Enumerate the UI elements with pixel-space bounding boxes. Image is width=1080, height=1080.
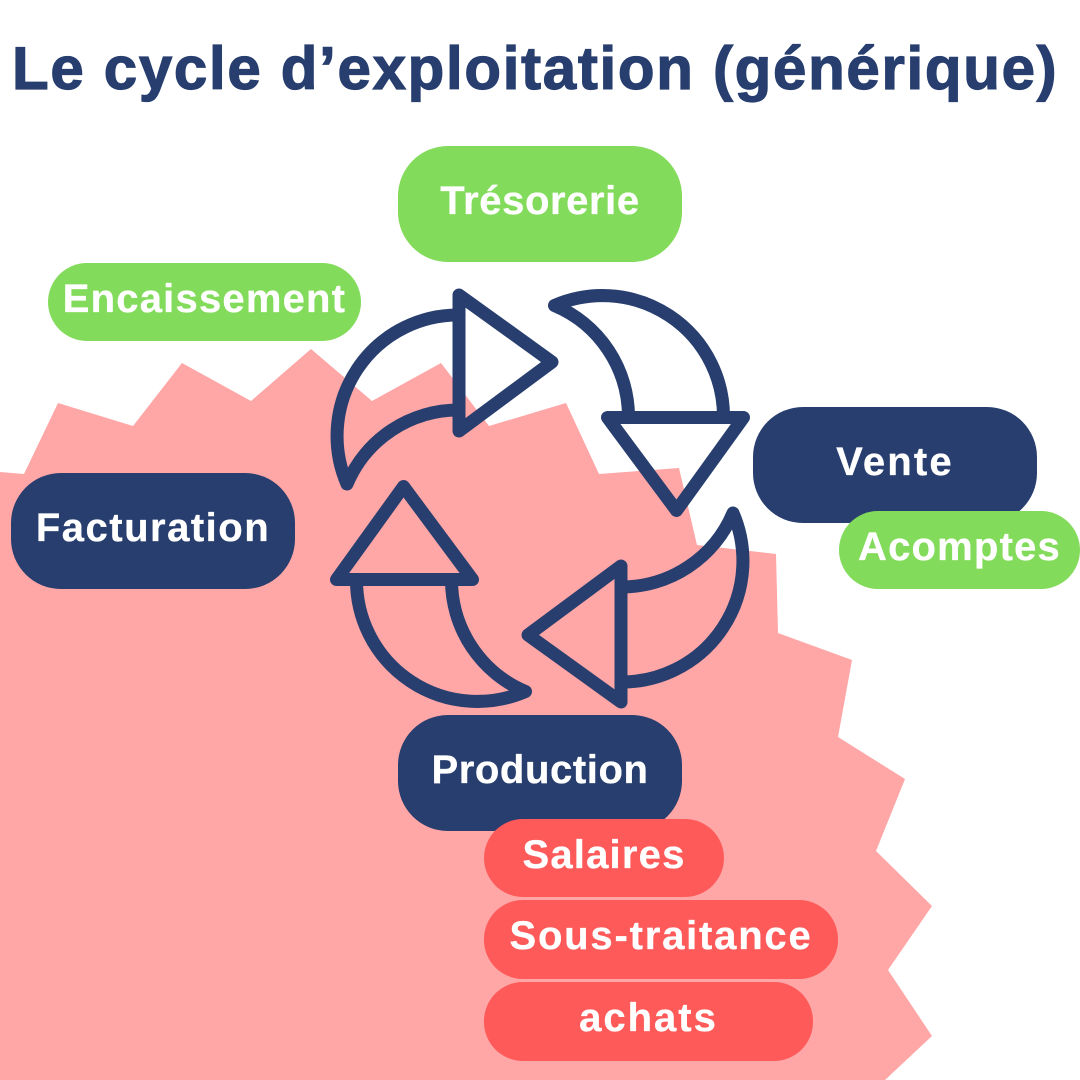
pill: Encaissement: Encaissement — [63, 276, 346, 320]
pill: Production — [398, 715, 682, 831]
pill: Trésorerie — [398, 146, 682, 262]
pill: Production: Production — [431, 748, 649, 792]
pill: Vente — [753, 407, 1037, 523]
pill: achats: achats — [579, 996, 718, 1040]
arrow: bottom right — [528, 513, 743, 702]
pill: achats — [484, 982, 813, 1061]
pill: Acomptes: Acomptes — [858, 524, 1061, 568]
pill: Salaires — [484, 819, 724, 897]
arrow: top left — [337, 295, 552, 484]
pill: Vente: Vente — [836, 440, 954, 484]
pill: Salaires: Salaires — [522, 832, 686, 876]
pill: Trésorerie: Trésorerie — [440, 178, 640, 222]
pill: Sous-traitance — [484, 900, 838, 979]
pill: Encaissement — [48, 263, 361, 341]
arrow: bottom left — [336, 486, 526, 701]
title: Le cycle d’exploitation (générique) — [12, 35, 1058, 102]
pill: Facturation — [11, 473, 295, 589]
pill: Sous-traitance: Sous-traitance — [509, 914, 813, 958]
arrow: top right — [554, 296, 744, 510]
pill: Acomptes — [839, 511, 1080, 589]
pill: Facturation: Facturation — [36, 506, 270, 550]
